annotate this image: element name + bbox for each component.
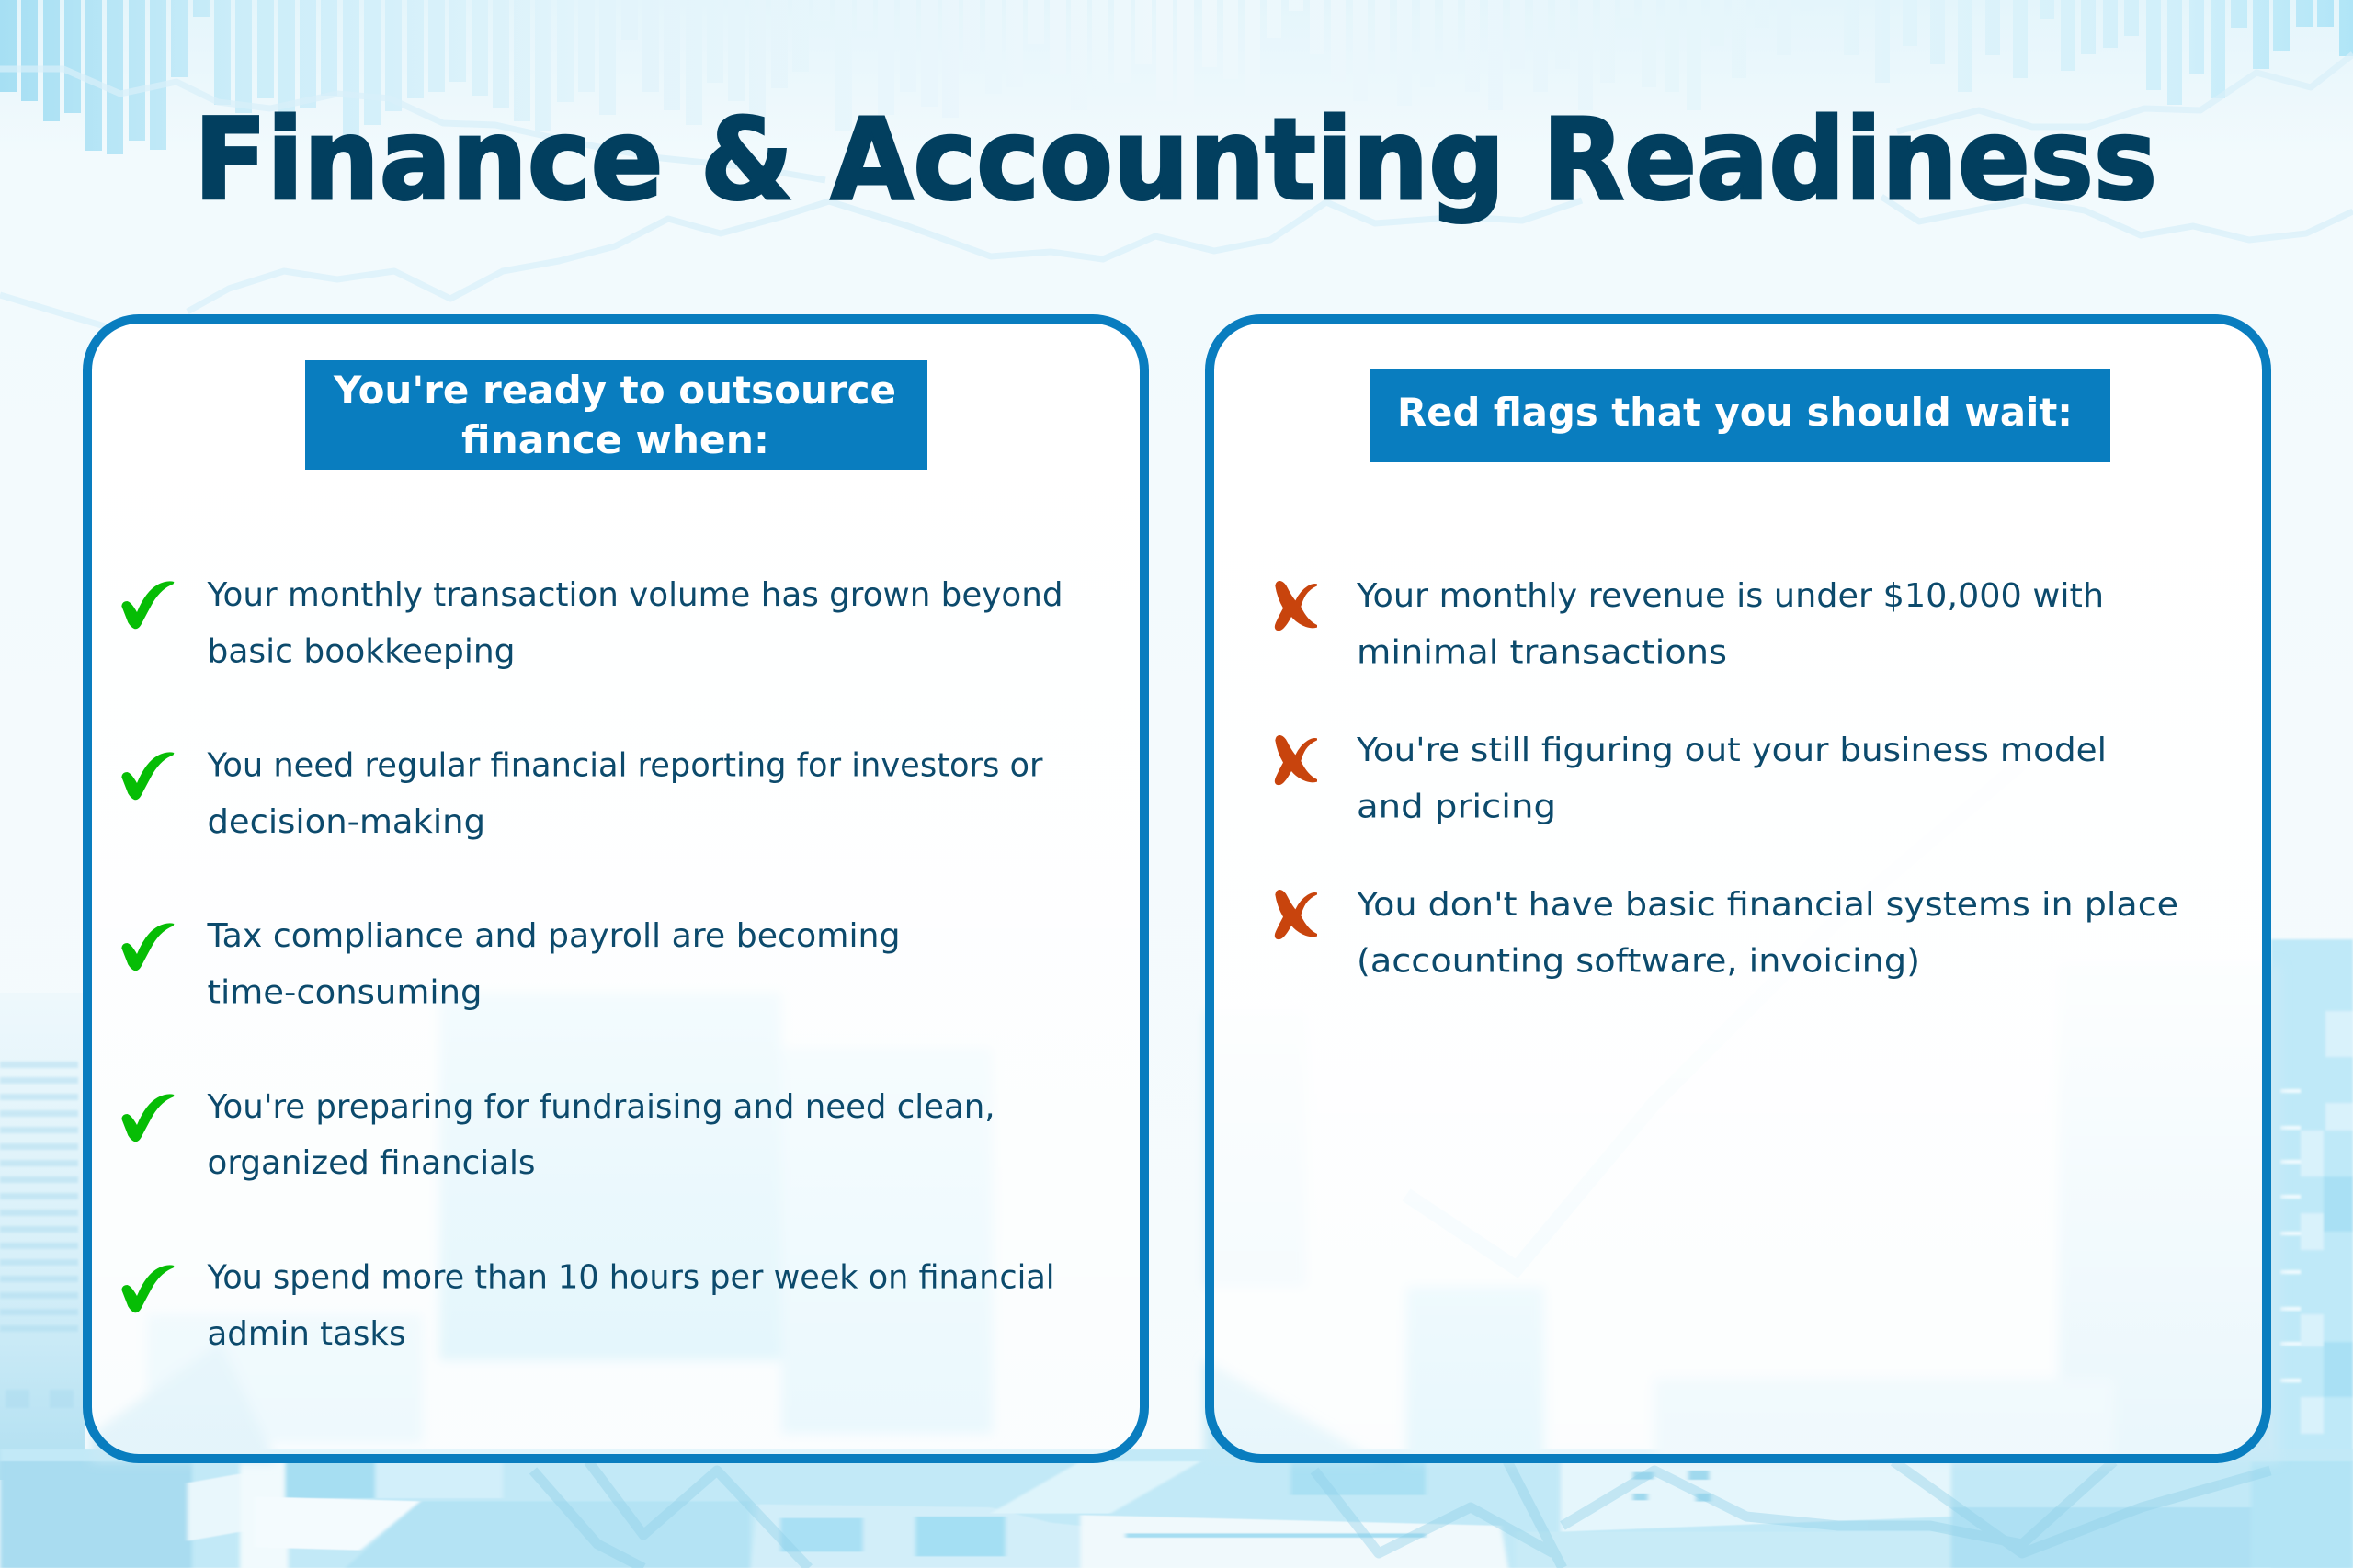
item text: Tax compliance and payroll are becoming	[206, 917, 901, 955]
background: faint rising chart line inside the right panel	[1406, 763, 2022, 1268]
item: admin hours	[121, 1259, 1055, 1353]
background: right edge building	[2271, 939, 2353, 1568]
icon: green check	[121, 581, 174, 629]
item: low revenue	[1275, 577, 2104, 671]
item: transaction volume	[121, 576, 1063, 671]
item text	[207, 746, 1043, 841]
icon: green check	[121, 752, 174, 800]
icon: green check	[121, 923, 174, 971]
item: tax and payroll	[121, 917, 901, 1011]
icon: green check	[121, 1265, 174, 1312]
item text: time-consuming	[208, 974, 482, 1011]
panel: ready to outsource	[87, 319, 1144, 1459]
background: candlestick bars along the top	[0, 0, 2353, 154]
icon: red cross	[1275, 735, 1317, 785]
item: fundraising	[121, 1088, 995, 1182]
item text: You spend more than 10 hours per week on financial	[207, 1259, 1055, 1296]
item text	[206, 1088, 995, 1182]
item text: You need regular financial reporting for investors or	[207, 746, 1043, 785]
item text	[206, 917, 901, 1011]
item: financial reporting	[121, 746, 1043, 841]
heading banner: left: You're ready to outsource	[333, 368, 896, 413]
item text: You're preparing for fundraising and need clean,	[206, 1088, 995, 1126]
heading banner: right: Red flags that you should wait:	[1397, 390, 2073, 435]
panel: red flags	[1210, 319, 2267, 1459]
title: Finance & Accounting Readiness	[194, 95, 2157, 225]
item text	[1356, 732, 2107, 825]
item text: You don't have basic financial systems in place	[1356, 886, 2178, 924]
item: business model	[1275, 732, 2107, 825]
heading banner: left: finance when:	[461, 417, 769, 462]
panel frame: right	[1210, 319, 2267, 1459]
item text: Your monthly revenue is under $10,000 with	[1356, 577, 2104, 615]
item text	[206, 576, 1063, 671]
icon: red cross	[1275, 890, 1317, 939]
item text: organized financials	[208, 1144, 535, 1182]
item: no systems	[1275, 886, 2178, 980]
background: chart lines across the city	[533, 1461, 2270, 1568]
item text: (accounting software, invoicing)	[1357, 943, 1920, 980]
item text	[207, 1259, 1055, 1353]
item text: admin tasks	[208, 1315, 406, 1353]
item text: You're still figuring out your business model	[1356, 732, 2107, 769]
icon: red cross	[1275, 581, 1317, 631]
item text: basic bookkeeping	[208, 632, 515, 671]
item text: Your monthly transaction volume has grown beyond	[206, 576, 1063, 614]
item text	[1356, 577, 2104, 671]
background: chart lines near the top	[0, 54, 2353, 326]
icon: green check	[121, 1094, 174, 1142]
background: left edge tint	[0, 993, 85, 1480]
background: faint buildings behind the panels	[92, 965, 2279, 1461]
item text	[1356, 886, 2178, 980]
heading banner: left	[305, 360, 927, 470]
panel frame: left	[87, 319, 1144, 1459]
item text: and pricing	[1357, 789, 1556, 825]
background: city in the bottom band	[0, 1449, 2353, 1568]
item text: minimal transactions	[1357, 634, 1727, 671]
heading banner: right	[1370, 369, 2110, 462]
item text: decision-making	[208, 803, 485, 841]
background: left window rows	[0, 1062, 78, 1408]
